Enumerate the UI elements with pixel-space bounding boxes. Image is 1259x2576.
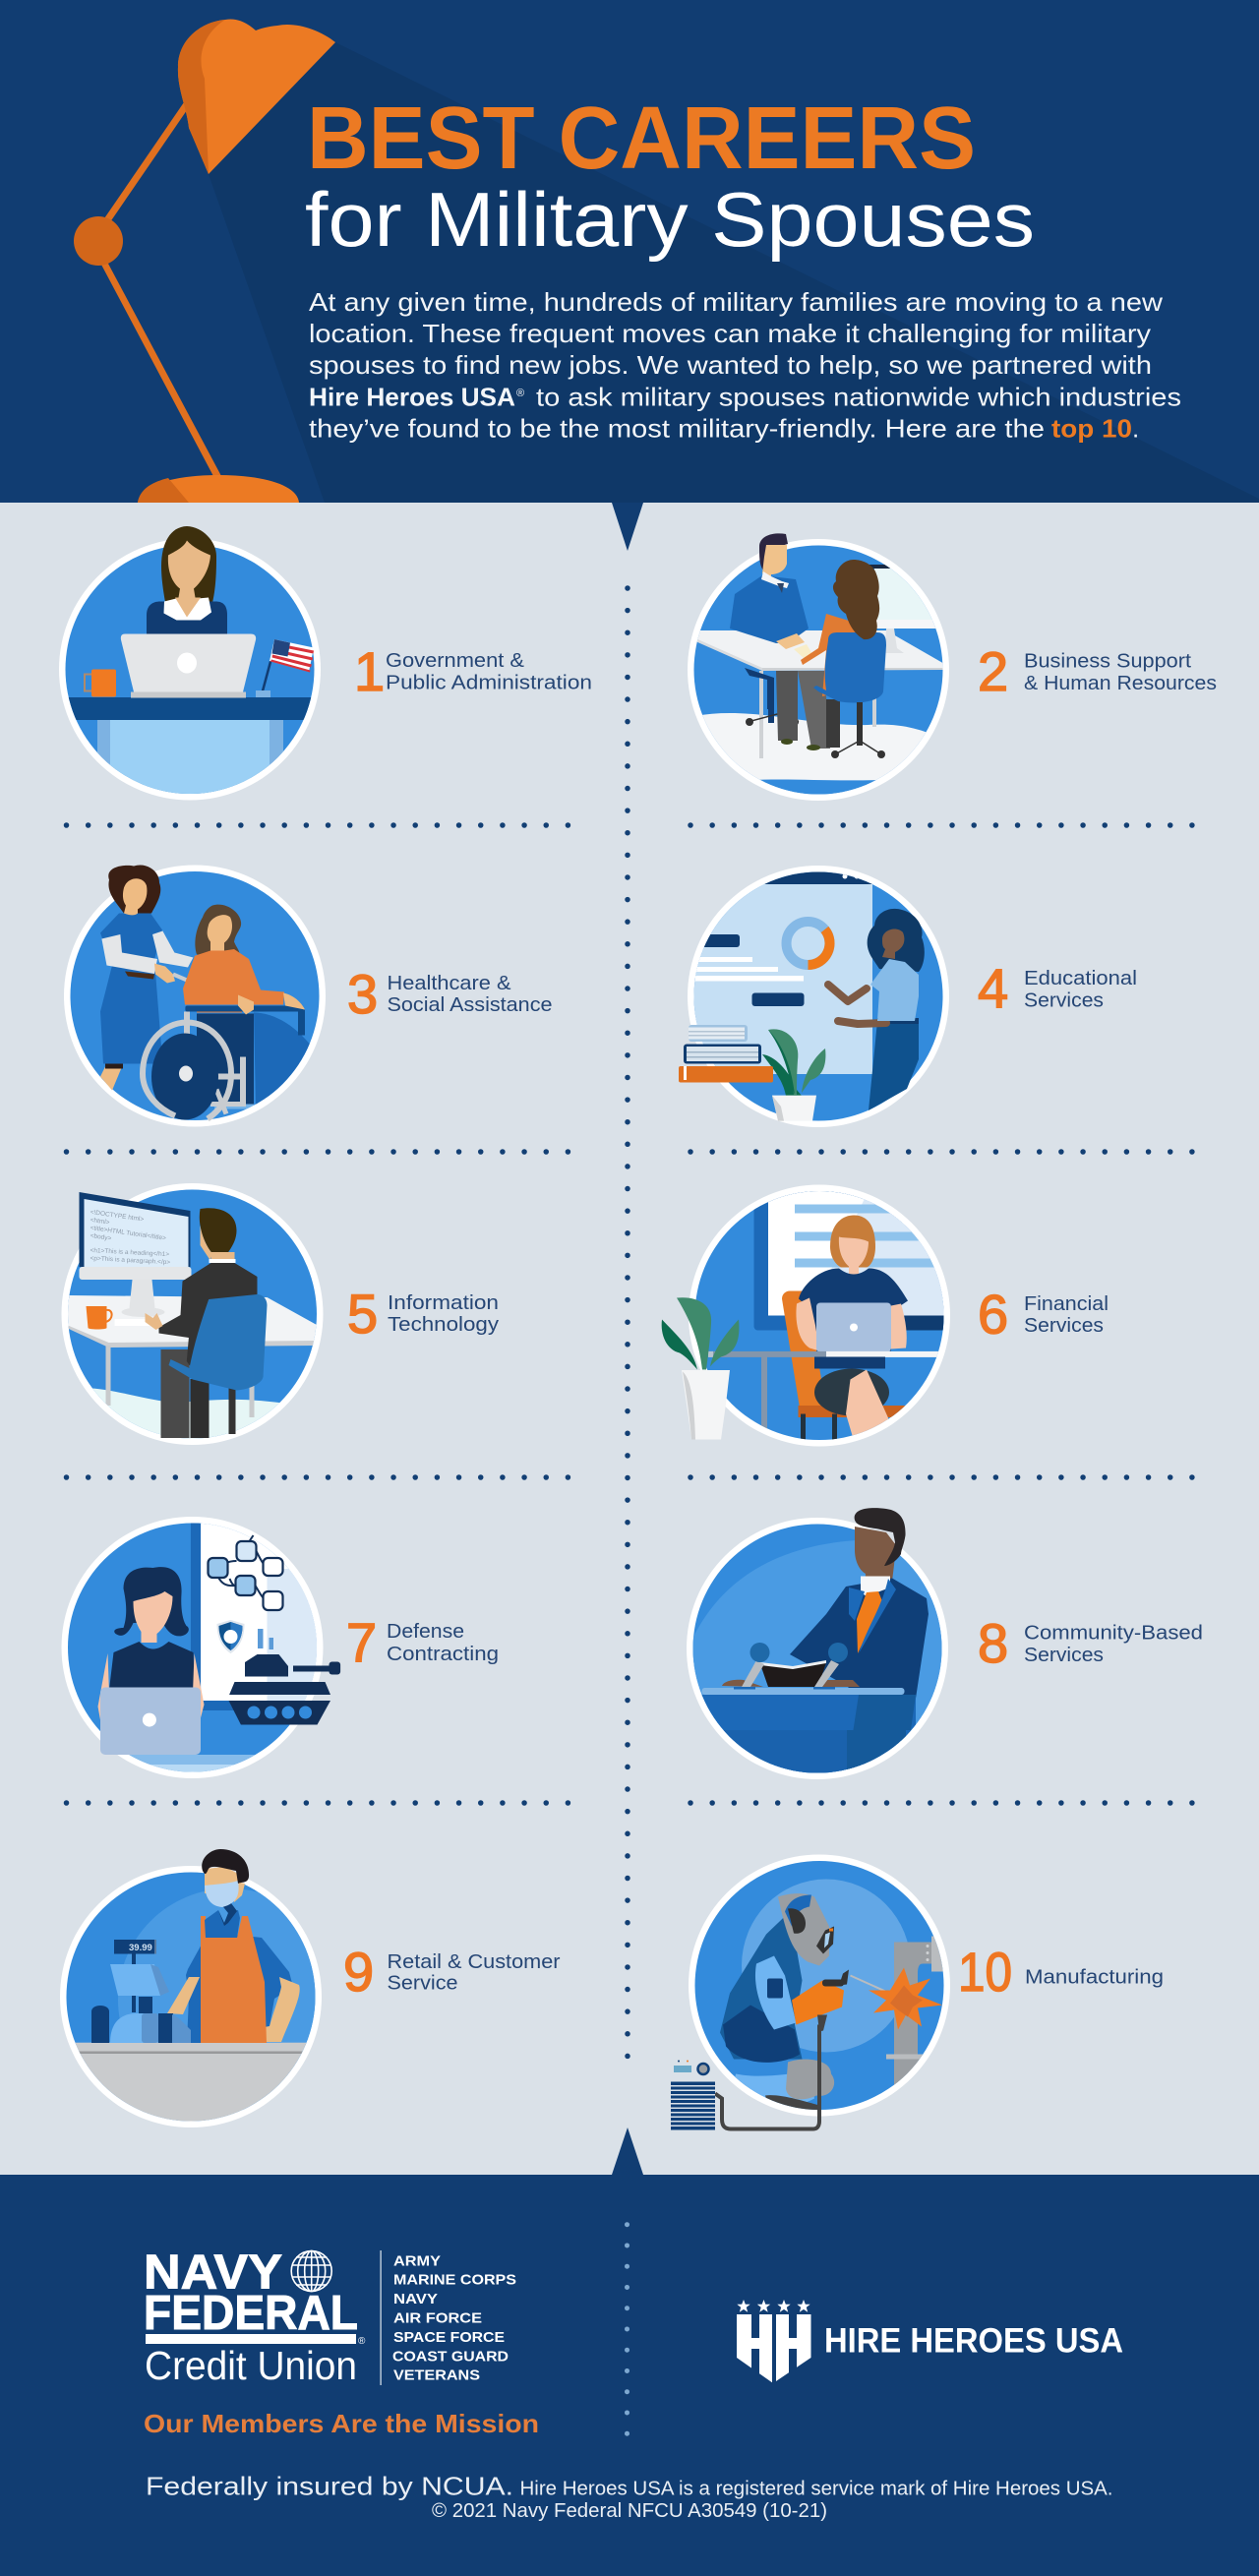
rank number 5: 5 — [347, 1283, 378, 1345]
tagline: Our Members Are the Mission — [144, 2409, 539, 2438]
icon: desk lamp — [74, 19, 335, 503]
career label 10: Manufacturing — [1025, 1966, 1164, 1989]
career 3: healthcare — [64, 865, 553, 1127]
icon: cashier with mask and register — [60, 1849, 340, 2131]
career label 3 — [388, 972, 553, 1016]
icon: four stars — [737, 2300, 810, 2312]
services list: SPACE FORCE — [393, 2329, 505, 2346]
career label 5 — [388, 1291, 500, 1336]
career 5: information technology — [61, 1183, 500, 1445]
code on monitor: <html> — [90, 1217, 110, 1227]
career 8: community-based — [687, 1508, 1203, 1783]
legal text: Hire Heroes USA is a registered service mark of Hire Heroes USA. — [519, 2478, 1113, 2500]
career 10: manufacturing — [671, 1855, 1164, 2130]
career label 9: Service — [388, 1972, 458, 1995]
text block: introduction: ® — [516, 388, 524, 399]
text block: introduction: spouses to find new jobs. We wanted to help, so we partnered with — [309, 350, 1152, 380]
rank number 9: 9 — [343, 1941, 374, 2003]
arrow: top pointer — [612, 503, 643, 551]
career label 4: Services — [1024, 989, 1104, 1011]
text block: introduction: location. These frequent moves can make it challenging for military — [309, 319, 1151, 348]
icon: government worker at desk — [59, 526, 321, 807]
career 6: financial — [662, 1184, 1109, 1446]
rank number 2: 2 — [978, 640, 1008, 702]
icon: globe — [291, 2250, 331, 2292]
text block: introduction: to ask military spouses nationwide which industries — [536, 382, 1181, 411]
text block: introduction: At any given time, hundreds of military families are moving to a new — [309, 287, 1163, 317]
legal text: Federally insured by NCUA. — [146, 2472, 513, 2501]
career 9: retail — [60, 1849, 561, 2131]
career 2: business support — [688, 533, 1217, 803]
icon: HH shield — [737, 2314, 810, 2383]
logo: Navy Federal Credit Union — [144, 2247, 516, 2388]
career label 4 — [1024, 967, 1137, 1011]
services list — [392, 2252, 516, 2384]
code on monitor — [90, 1209, 171, 1266]
career label 3: Social Assistance — [388, 993, 553, 1016]
services list: COAST GUARD — [392, 2348, 509, 2365]
career label 2 — [1024, 649, 1217, 694]
career label 5: Information — [388, 1291, 499, 1314]
career label 2: & Human Resources — [1024, 672, 1217, 694]
panel: careers background — [0, 503, 1259, 2175]
code on monitor: <h1>This is a heading</h1> — [90, 1247, 169, 1258]
icon: speaker at podium — [687, 1508, 948, 1783]
icon: woman with laptop, flowchart and tank — [61, 1517, 340, 1778]
code on monitor: <title>HTML Tutorial</title> — [90, 1225, 166, 1242]
career label 6: Services — [1024, 1314, 1104, 1337]
rank number 6: 6 — [978, 1283, 1008, 1346]
arrow: bottom pointer — [612, 2127, 643, 2175]
legal text: © 2021 Navy Federal NFCU A30549 (10-21) — [432, 2500, 827, 2522]
icon: programmer at computer — [61, 1183, 323, 1445]
services list: AIR FORCE — [393, 2310, 482, 2327]
icon: nurse and patient in wheelchair — [64, 865, 326, 1127]
text block: introduction: top 10 — [1051, 414, 1132, 444]
code on monitor: <!DOCTYPE html> — [90, 1209, 145, 1224]
career label 7: Defense — [387, 1620, 464, 1643]
icon: teacher at presentation board — [679, 866, 949, 1127]
career label 7 — [387, 1620, 499, 1665]
footer divider — [625, 2225, 630, 2434]
career label 1: Public Administration — [386, 671, 592, 694]
career label 9: Retail & Customer — [388, 1950, 561, 1973]
career label 9 — [388, 1950, 561, 1995]
rank number 3: 3 — [347, 963, 378, 1025]
code on monitor: <p>This is a paragraph.</p> — [90, 1255, 171, 1266]
services list: NAVY — [393, 2291, 438, 2307]
career label 1: Government & — [386, 649, 524, 672]
title: for Military Spouses — [305, 176, 1035, 263]
career 7: defense contracting — [61, 1517, 499, 1778]
rank number 1: 1 — [354, 640, 385, 702]
logo: Hire Heroes USA — [737, 2300, 1123, 2383]
career label 2: Business Support — [1024, 649, 1191, 673]
price tag: 39.99 — [129, 1943, 152, 1953]
logo: Hire Heroes USA: HIRE HEROES USA — [824, 2322, 1123, 2361]
code on monitor: <body> — [90, 1232, 112, 1242]
welding machine — [671, 2024, 819, 2130]
career label 8: Community-Based — [1024, 1621, 1203, 1645]
text block: introduction: Hire Heroes USA — [309, 382, 515, 411]
career 4: education — [679, 866, 1137, 1127]
career label 7: Contracting — [387, 1643, 499, 1665]
legal text — [146, 2472, 1113, 2522]
rank number 4: 4 — [978, 957, 1008, 1019]
text block: introduction: they’ve found to be the most military-friendly. Here are the — [309, 414, 1045, 444]
icon: welder with sparks and machine — [671, 1855, 950, 2130]
services list: MARINE CORPS — [393, 2272, 516, 2289]
footer panel background — [0, 2175, 1259, 2576]
icon: woman with laptop and plant — [662, 1184, 950, 1446]
logo: Navy Federal Credit Union: ® — [358, 2336, 366, 2347]
career 1: government — [59, 526, 592, 807]
career label 6 — [1024, 1292, 1109, 1337]
services list: VETERANS — [393, 2367, 480, 2384]
title — [305, 90, 1035, 263]
logo: Navy Federal Credit Union: NAVY — [144, 2247, 282, 2300]
career label 8: Services — [1024, 1644, 1104, 1666]
logo: Navy Federal Credit Union: Credit Union — [145, 2343, 357, 2388]
career label 1 — [386, 649, 592, 694]
logo: Navy Federal Credit Union: FEDERAL — [144, 2287, 358, 2340]
text block: introduction — [309, 287, 1181, 444]
rank number 10: 10 — [958, 1941, 1012, 2003]
career label 8 — [1024, 1621, 1203, 1666]
icon: HR meeting at table — [688, 533, 949, 803]
panel: header — [0, 0, 1259, 503]
title: BEST CAREERS — [307, 90, 976, 188]
career label 6: Financial — [1024, 1292, 1109, 1315]
text block: introduction: . — [1132, 414, 1139, 444]
rank number 7: 7 — [346, 1611, 377, 1673]
career label 3: Healthcare & — [388, 972, 511, 994]
services list: ARMY — [393, 2252, 441, 2269]
rank number 8: 8 — [978, 1612, 1008, 1674]
career label 5: Technology — [388, 1313, 500, 1336]
career label 4: Educational — [1024, 967, 1137, 989]
